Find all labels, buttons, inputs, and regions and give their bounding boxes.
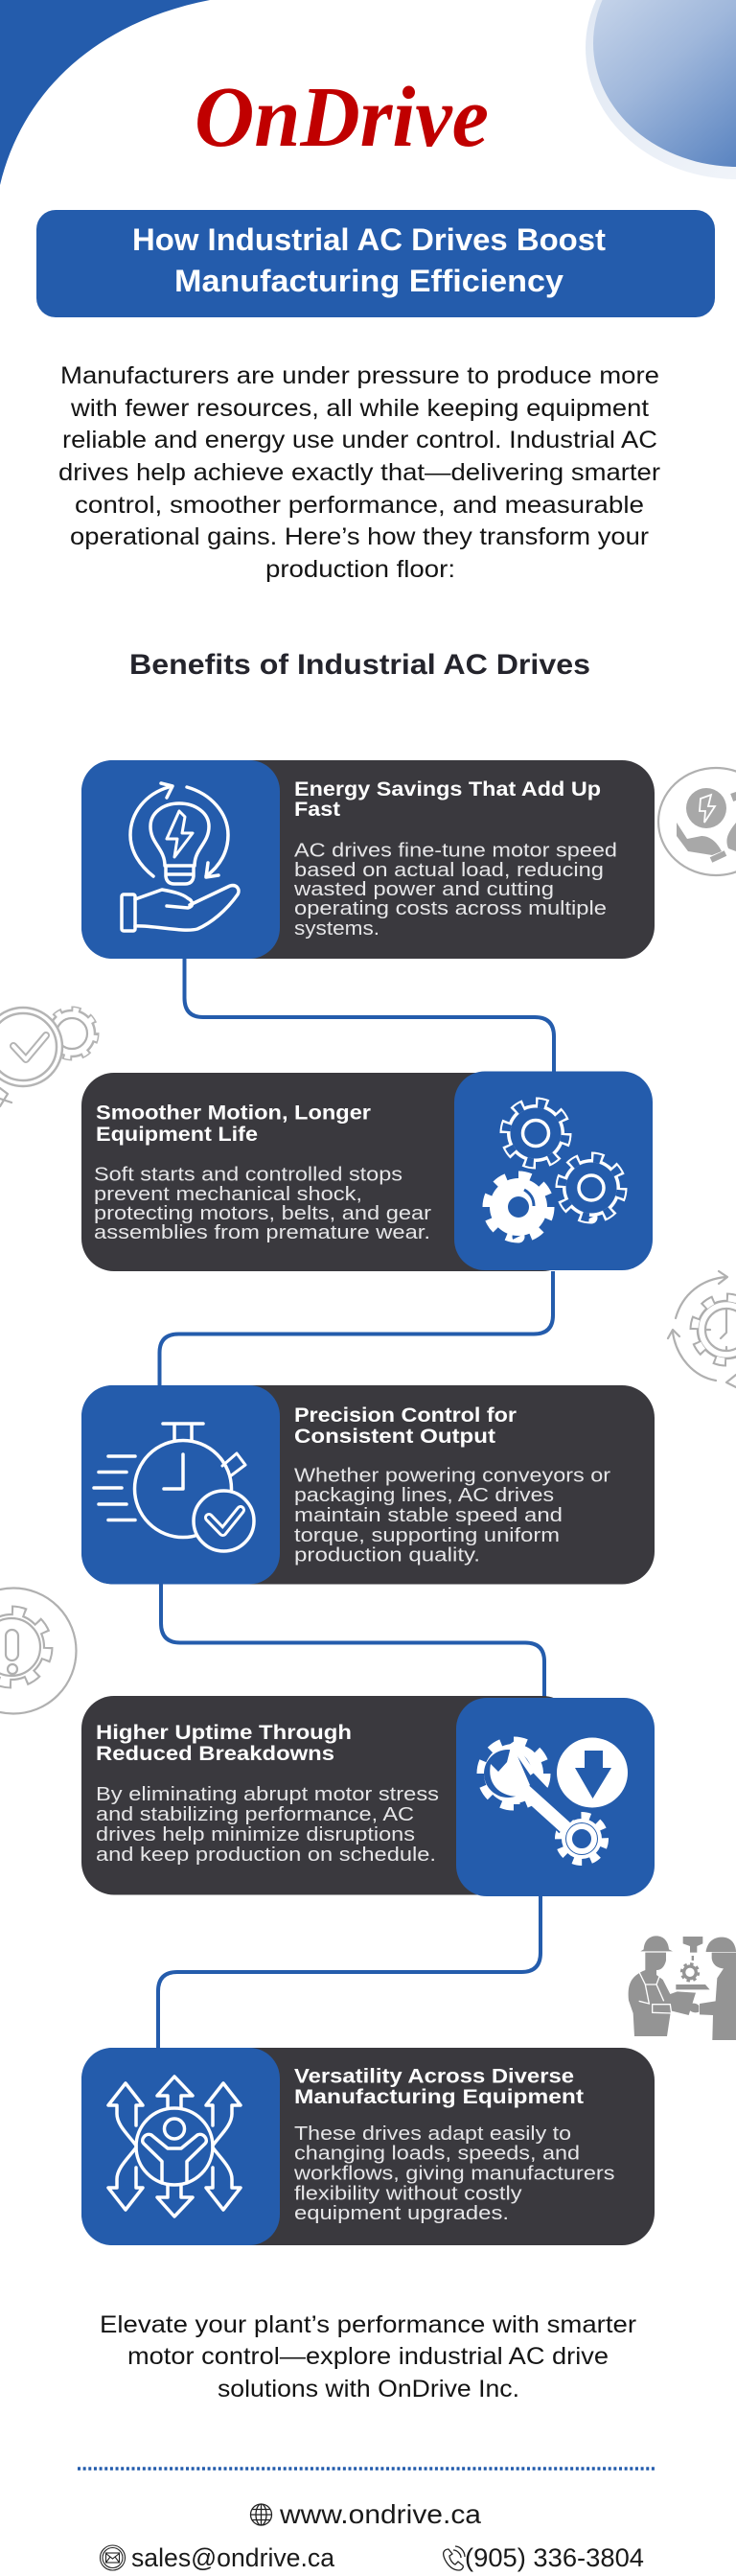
card 4 text: Higher Uptime Through: [96, 1722, 352, 1744]
side icon: energy hands: [658, 768, 736, 875]
card 1 text: wasted power and cutting: [293, 879, 554, 900]
card 3 text: torque, supporting uniform: [294, 1525, 560, 1546]
card 3 text: Precision Control for: [294, 1404, 517, 1427]
card 4: higher uptime: [81, 1696, 655, 1896]
dotted divider: [78, 2467, 656, 2471]
intro paragraph: operational gains. Here’s how they transform your: [70, 523, 649, 550]
title banner: [36, 210, 715, 317]
side icon: workers: [629, 1936, 736, 2040]
card 2 text: protecting motors, belts, and gear: [94, 1203, 431, 1224]
side icon: warning gear: [0, 1588, 77, 1714]
card 3 text: production quality.: [294, 1545, 480, 1566]
card 5 text: These drives adapt easily to: [294, 2123, 571, 2145]
contact: website: www.ondrive.ca: [279, 2499, 481, 2529]
card 2 text: Equipment Life: [96, 1124, 258, 1146]
icon: stopwatch with check: [94, 1424, 254, 1551]
card 3 text: Whether powering conveyors or: [294, 1465, 610, 1486]
section heading: Benefits of Industrial AC Drives: [129, 649, 590, 681]
card 5 text: Manufacturing Equipment: [294, 2086, 584, 2108]
closing call to action: [100, 2311, 636, 2402]
card 2 text: assemblies from premature wear.: [94, 1222, 430, 1243]
card 4 text: By eliminating abrupt motor stress: [96, 1784, 439, 1805]
card 2: smoother motion: [81, 1072, 653, 1271]
contact: email: sales@ondrive.ca: [131, 2543, 335, 2572]
card 1 text: operating costs across multiple: [294, 898, 607, 919]
intro paragraph: control, smoother performance, and measurable: [75, 492, 644, 519]
card 1: energy savings: [81, 760, 655, 959]
intro paragraph: Manufacturers are under pressure to produce more: [60, 362, 659, 389]
connector lines between cards: [158, 959, 554, 2049]
card 3 text: maintain stable speed and: [294, 1505, 563, 1526]
title banner: Manufacturing Efficiency: [174, 264, 564, 298]
icon: bulb in hand: [122, 783, 239, 931]
card 3 text: Consistent Output: [294, 1426, 495, 1448]
card 4 text: and keep production on schedule.: [96, 1845, 436, 1866]
card 5: versatility: [81, 2048, 655, 2245]
card 5 text: [293, 2065, 615, 2224]
card 1 text: [293, 778, 617, 940]
intro paragraph: drives help achieve exactly that—delivering smarter: [58, 459, 660, 486]
card 4 text: Reduced Breakdowns: [96, 1743, 334, 1765]
card 2 text: Smoother Motion, Longer: [96, 1102, 371, 1124]
icon: person with six arrows: [108, 2077, 241, 2216]
side icon: clock gear cycle: [668, 1271, 736, 1387]
card 3: precision control: [81, 1385, 655, 1584]
decorative corner: gradient circle: [586, 0, 736, 179]
card 1 text: AC drives fine-tune motor speed: [294, 840, 617, 861]
card 4 text: drives help minimize disruptions: [96, 1824, 415, 1845]
contact: phone: (905) 336-3804: [465, 2543, 644, 2572]
card 5 text: flexibility without costly: [294, 2184, 521, 2205]
card 1 text: systems.: [294, 918, 380, 940]
intro paragraph: [58, 362, 660, 583]
decorative corner: blue curve: [0, 0, 210, 185]
closing call to action: motor control—explore industrial AC drive: [127, 2343, 609, 2370]
side icon: magnifier and gear: [0, 1008, 95, 1106]
card 5 text: Versatility Across Diverse: [294, 2065, 574, 2088]
card 3 text: packaging lines, AC drives: [294, 1485, 554, 1506]
title banner: How Industrial AC Drives Boost: [132, 222, 606, 257]
intro paragraph: reliable and energy use under control. Industrial AC: [62, 427, 657, 453]
closing call to action: solutions with OnDrive Inc.: [218, 2376, 519, 2402]
card 2 text: prevent mechanical shock,: [94, 1184, 362, 1205]
card 1 text: based on actual load, reducing: [294, 860, 604, 881]
closing call to action: Elevate your plant’s performance with smarter: [100, 2311, 636, 2338]
intro paragraph: with fewer resources, all while keeping equipment: [70, 395, 649, 422]
card 1 text: Energy Savings That Add Up: [294, 778, 601, 801]
icon: gear wrench and down arrow: [483, 1737, 628, 1861]
card 4 text: [96, 1722, 439, 1866]
intro paragraph: production floor:: [265, 556, 455, 583]
card 2 text: [94, 1102, 431, 1243]
card 5 text: workflows, giving manufacturers: [293, 2163, 615, 2184]
card 3 text: [294, 1404, 610, 1566]
icon: three gears: [489, 1103, 621, 1237]
logo: OnDrive: [195, 70, 489, 165]
card 5 text: changing loads, speeds, and: [294, 2144, 580, 2165]
card 4 text: and stabilizing performance, AC: [96, 1804, 414, 1825]
card 5 text: equipment upgrades.: [294, 2203, 509, 2224]
card 2 text: Soft starts and controlled stops: [94, 1164, 402, 1185]
card 1 text: Fast: [294, 799, 340, 821]
